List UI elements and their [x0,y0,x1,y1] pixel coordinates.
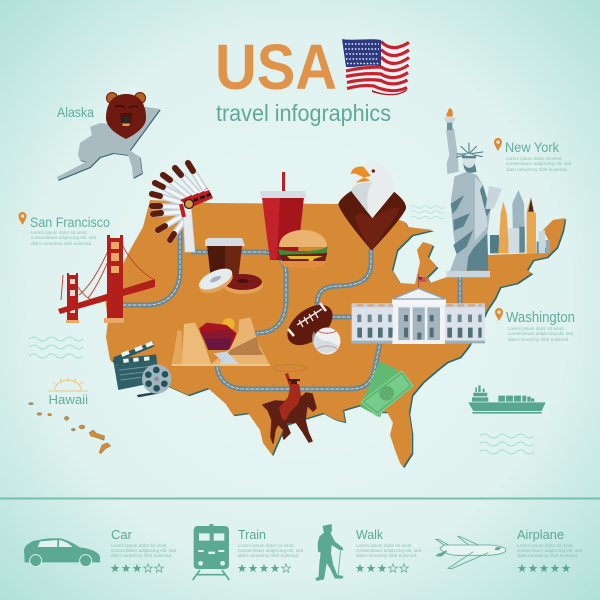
label: San Francisco: consectetuer adipiscing elit, sed [31,235,97,240]
description: Walk: consectetuer adipiscing elit, sed [356,548,422,553]
description: Walk: diam nonummy nibh euismod. [356,553,417,558]
footer divider [0,498,600,500]
icon: dollar bills [360,361,414,417]
icon: film reel [137,364,171,397]
rating: Train [238,564,290,572]
description: Airplane: consectetuer adipiscing elit, sed [517,548,583,553]
label: Washington: diam nonummy nibh euismod. [508,337,569,342]
Hawaii islands [29,402,111,454]
label: Hawaii: Hawaii [48,392,88,407]
icon: Statue of Liberty [444,108,502,277]
description: Train [238,543,304,558]
description: Train: consectetuer adipiscing elit, sed [238,548,304,553]
heading: Car: Car [111,527,133,542]
description: Car: Lorem ipsum dolor sit amet, [111,543,168,548]
icon: Golden Gate bridge [58,235,155,323]
transport: car [24,527,177,572]
label: New York: diam nonummy nibh euismod. [506,167,567,172]
icon: canyon landscape [172,317,270,366]
description: Airplane: diam nonummy nibh euismod. [517,553,578,558]
icon: small flag [418,274,426,288]
subtitle: travel infographics [216,100,391,126]
icon: baseball [312,328,340,354]
label: San Francisco: San Francisco [30,214,110,230]
title: USA [215,31,337,103]
description: Walk [356,543,422,558]
description: Car: consectetuer adipiscing elit, sed [111,548,177,553]
transport: train [193,524,304,580]
icon: cargo ship [468,385,546,414]
Alaska map [57,107,161,181]
map of the USA [105,200,566,468]
waves: north east [411,206,444,219]
icon: US flag [342,39,409,95]
label: San Francisco: diam nonummy nibh euismod. [31,241,92,246]
rating: Walk [356,564,408,572]
icon: donuts [196,264,263,298]
description: Airplane: Lorem ipsum dolor sit amet, [517,543,574,548]
icon: film clapperboard [113,342,159,390]
label: New York: consectetuer adipiscing elit, sed [506,161,572,166]
waves: atlantic [480,434,534,454]
icon: soda cup [260,172,306,260]
icon: White House [352,288,485,344]
waves: near San Francisco [29,337,83,358]
icon: bear head [106,92,146,139]
rating: Car [111,564,163,572]
transport: walk [315,524,422,581]
label: Washington: consectetuer adipiscing elit, sed [508,331,574,336]
description: Car [111,543,177,558]
label: New York: Lorem ipsum dolor sit amet, [506,156,563,161]
label: New York: New York [505,139,560,155]
description: Train: Lorem ipsum dolor sit amet, [238,543,295,548]
icon: train [193,524,229,580]
icon: burger [278,230,328,268]
transport: airplane [436,527,583,572]
icon: car [24,538,100,567]
heading: Airplane: Airplane [517,527,564,542]
heading: Walk: Walk [356,527,383,542]
description: Car: diam nonummy nibh euismod. [111,553,172,558]
description: Train: diam nonummy nibh euismod. [238,553,299,558]
roads [123,233,460,389]
icon: feather headdress [152,163,213,252]
icon: skyline [490,190,550,253]
icon: airplane [436,537,506,569]
description: Walk: Lorem ipsum dolor sit amet, [356,543,413,548]
heading: Train: Train [238,527,266,542]
icon: Hawaii sun [48,377,88,391]
icon: bald eagle [338,163,406,251]
label: San Francisco [18,212,110,246]
rating: Airplane [518,564,570,572]
icon: American football [280,297,340,353]
label: New York [494,138,572,172]
label: San Francisco: Lorem ipsum dolor sit amet, [31,230,88,235]
icon: coffee cup [205,238,245,280]
icon: cowboy on a horse [263,364,316,443]
label: Washington: Lorem ipsum dolor sit amet, [508,326,565,331]
label: Washington [495,308,575,342]
icon: hiker [315,524,343,581]
label: Washington: Washington [506,310,575,326]
description: Airplane [517,543,583,558]
label: Alaska: Alaska [57,104,94,120]
